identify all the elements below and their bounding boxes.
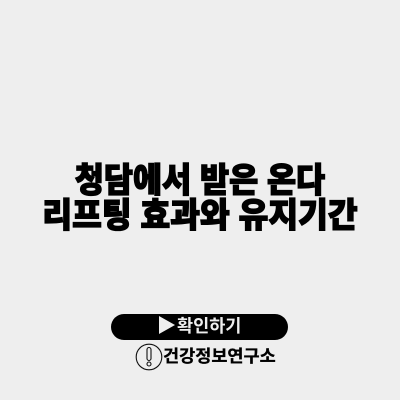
icon: play triangle — [159, 316, 175, 334]
brand row — [136, 344, 276, 370]
button label: 확인하기 — [177, 316, 241, 336]
title line 2: 리프팅 효과와 유지기간 — [42, 197, 358, 235]
title line 1: 청담에서 받은 온다 — [75, 162, 325, 200]
title — [42, 162, 358, 235]
icon: exclamation circle — [136, 344, 162, 370]
brand name: 건강정보연구소 — [163, 347, 276, 366]
button: confirm — [111, 314, 288, 340]
